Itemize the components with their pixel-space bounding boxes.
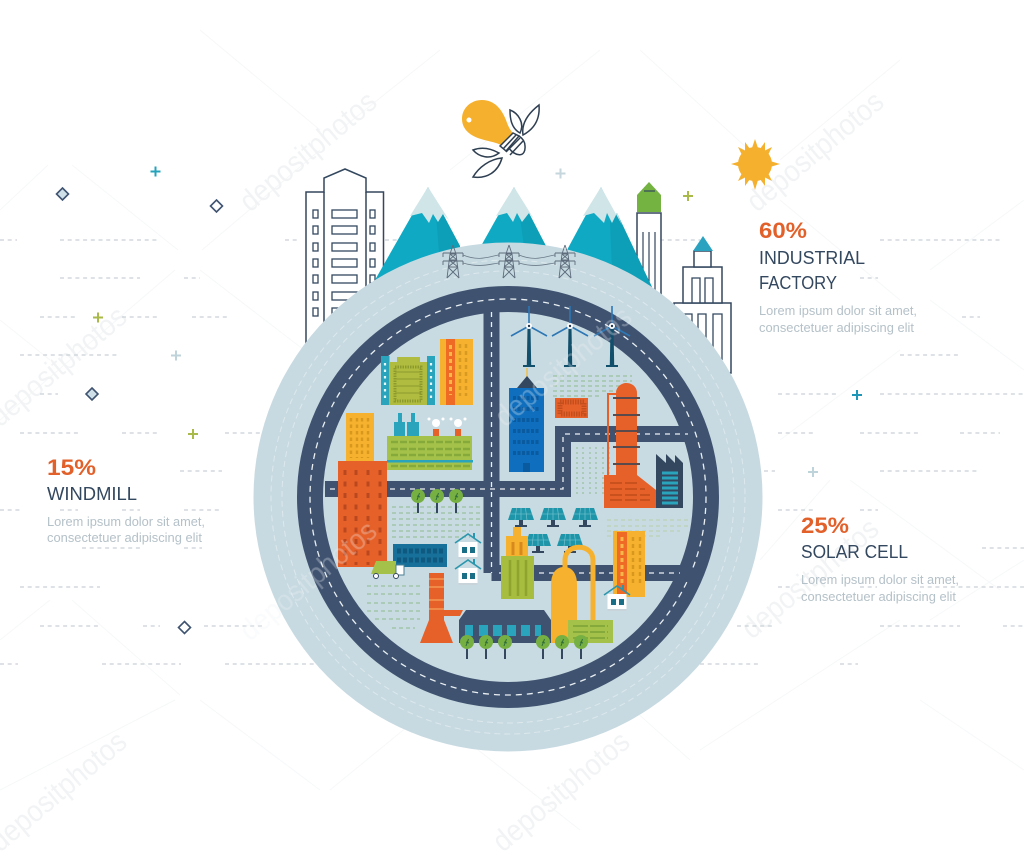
text block: solar cell: consectetuer adipiscing elit <box>801 589 956 604</box>
text block: solar cell: 25% <box>801 513 849 538</box>
garbage truck <box>371 561 404 578</box>
houses <box>455 533 481 585</box>
wind turbines <box>511 306 630 367</box>
green office building <box>381 356 435 405</box>
text block: windmill: Lorem ipsum dolor sit amet, <box>47 514 205 529</box>
text block: solar cell <box>801 513 959 604</box>
decorative diamonds and plus marks <box>56 166 862 634</box>
watermarks over globe <box>233 300 638 647</box>
text block: windmill <box>47 455 205 545</box>
text block: industrial factory: FACTORY <box>759 273 837 293</box>
power pylons and wires <box>443 245 575 278</box>
text block: industrial factory: 60% <box>759 218 807 243</box>
text block: industrial factory: Lorem ipsum dolor sit amet, <box>759 303 917 318</box>
text block: solar cell: Lorem ipsum dolor sit amet, <box>801 572 959 587</box>
text block: windmill: consectetuer adipiscing elit <box>47 530 202 545</box>
globe circle <box>254 242 762 752</box>
dark factory building <box>656 454 683 508</box>
trees lower row <box>460 635 588 659</box>
text block: windmill: WINDMILL <box>47 484 137 504</box>
green box <box>568 620 613 643</box>
yellow tank with pipe <box>551 547 593 643</box>
blue warehouse <box>393 544 447 567</box>
inner city ground and ring road <box>310 299 706 695</box>
text block: industrial factory: INDUSTRIAL <box>759 248 865 268</box>
icon: light bulb with leaves <box>462 100 539 177</box>
building: right stepped tower <box>674 236 731 373</box>
green factory with bottles and chimneys <box>387 413 473 470</box>
dashed background lines <box>0 240 1024 664</box>
text block: industrial factory <box>759 218 917 335</box>
text block: windmill: 15% <box>47 455 96 480</box>
blue skyscraper <box>509 368 544 472</box>
dark hall with teal windows <box>459 610 551 643</box>
green field patches <box>367 376 690 628</box>
small orange block <box>555 398 588 418</box>
inner road network <box>325 306 694 573</box>
building: left skyscraper outline <box>306 169 384 345</box>
house over right tower <box>604 585 630 611</box>
orange and yellow tower right <box>613 531 645 597</box>
trees upper row <box>411 489 463 513</box>
text block: solar cell: SOLAR CELL <box>801 542 908 562</box>
green and yellow tower <box>501 527 534 599</box>
text block: industrial factory: consectetuer adipiscing elit <box>759 320 914 335</box>
yellow tower left <box>346 413 374 461</box>
mountains <box>375 187 652 287</box>
orange refinery tower <box>604 383 656 508</box>
outer circle dashes <box>271 260 745 734</box>
icon: sun <box>731 139 780 190</box>
red orange building <box>338 461 387 567</box>
building: tall green-topped tower <box>637 182 661 300</box>
orange chimney <box>420 573 463 643</box>
orange and yellow tower top-left <box>440 339 473 405</box>
solar panels <box>508 508 598 553</box>
